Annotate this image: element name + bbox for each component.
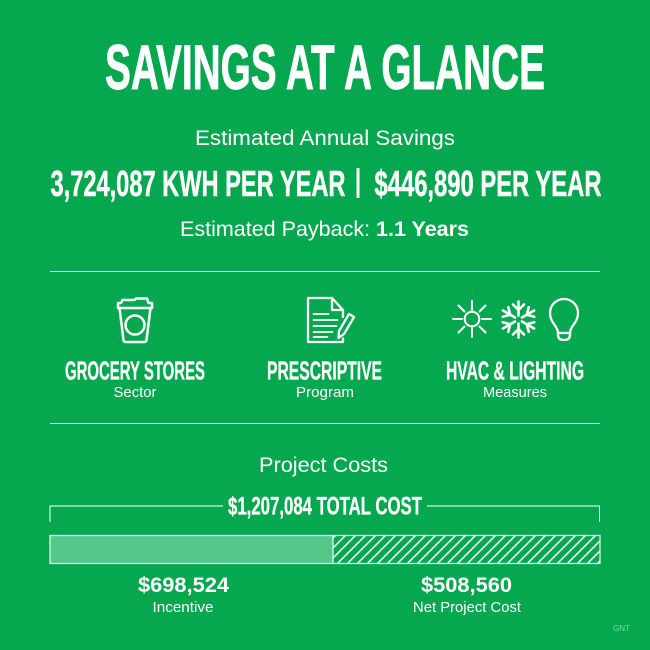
bracket line right [427,506,600,522]
value: incentive: $698,524 [138,574,229,597]
credit: GNT [613,623,630,633]
icon: snowflake [500,302,537,338]
stacked cost bar [50,536,600,564]
panel: measures [446,299,584,401]
bar segment: incentive [50,536,333,564]
value: incentive [138,574,229,616]
headline savings figures [50,163,602,204]
total cost label: $1,207,084 TOTAL COST [228,492,422,520]
value: net project cost [413,574,521,616]
panel: sector [65,298,205,401]
heading: grocery stores: GROCERY STORES [65,356,205,386]
icon: document and pencil [308,298,354,342]
label: program: Program [296,385,354,401]
label: measures: Measures [483,385,547,401]
heading: project costs: Project Costs [259,454,388,477]
bracket line left [50,506,223,522]
icon: coffee cup [118,298,152,342]
panel: program [267,298,382,401]
separator [356,168,360,198]
bar segment: net project cost [333,536,600,564]
label: incentive: Incentive [152,600,214,616]
figure: kwh per year: 3,724,087 KWH PER YEAR [50,163,346,204]
value: net project cost: $508,560 [421,574,512,597]
icon: sun [453,301,491,337]
total cost bracket [50,492,600,522]
subtitle: estimated annual savings: Estimated Annual Savings [195,127,455,150]
icon: light bulb [550,299,578,340]
heading: prescriptive: PRESCRIPTIVE [267,356,382,386]
estimated payback: Estimated Payback: 1.1 Years [180,218,469,241]
label: sector: Sector [114,385,157,401]
label: net project cost: Net Project Cost [413,600,521,616]
